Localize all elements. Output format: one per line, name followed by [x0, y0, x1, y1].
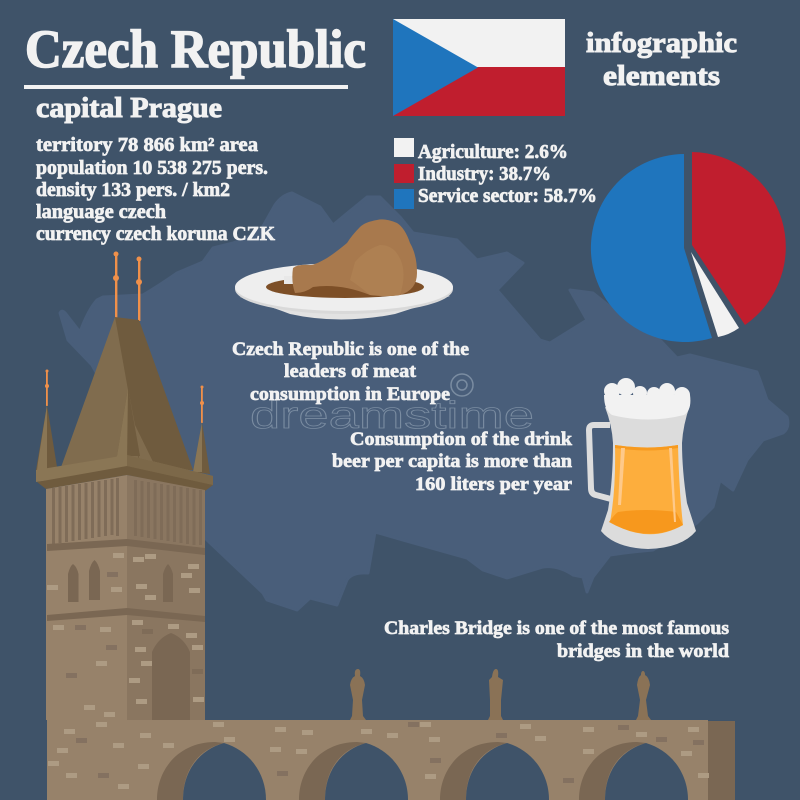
bridge arches [157, 742, 688, 800]
text: meat consumption: consumption in Europe [250, 384, 450, 405]
tower roof [36, 317, 213, 491]
icon: Czech flag [393, 19, 565, 116]
text: beer consumption: beer per capita is more than [332, 451, 572, 472]
country facts: currency czech koruna CZK [36, 224, 276, 245]
watermark: dreamstime [250, 395, 534, 437]
Charles Bridge [47, 720, 735, 800]
title underline [24, 85, 348, 89]
tower slats [52, 478, 202, 545]
tower finials [45, 252, 204, 423]
legend [394, 138, 597, 209]
legend: Industry: 38.7% [418, 164, 551, 185]
text: meat consumption: Czech Republic is one of the [232, 339, 469, 360]
country facts [36, 135, 276, 245]
tower bricks [47, 553, 204, 717]
bridge end pier [708, 721, 735, 800]
text: Charles Bridge: Charles Bridge is one of the most famous [384, 618, 729, 639]
country facts: territory 78 866 km² area [36, 135, 258, 156]
heading: infographic elements: infographic [586, 27, 737, 59]
text: meat consumption [232, 339, 469, 405]
heading: infographic elements: elements [603, 60, 720, 92]
icon: meat on plate [235, 219, 453, 320]
text: beer consumption [332, 429, 573, 495]
text: beer consumption: 160 liters per year [415, 474, 573, 495]
text: meat consumption: leaders of meat [284, 361, 417, 382]
beer foam [604, 378, 690, 420]
heading: infographic elements [586, 27, 737, 92]
text: beer consumption: Consumption of the drink [350, 429, 572, 450]
subtitle: capital: capital Prague [36, 92, 222, 124]
tower bands [47, 539, 205, 622]
country facts: density 133 pers. / km2 [36, 180, 230, 201]
watermark [250, 374, 534, 437]
pie chart [591, 152, 786, 342]
bridge deck [47, 720, 708, 800]
map of Czech Republic silhouette [60, 193, 788, 610]
legend: Agriculture: 2.6% [418, 142, 568, 163]
Old Town Bridge Tower [36, 252, 213, 720]
tower door [152, 633, 190, 720]
country facts: population 10 538 275 pers. [36, 158, 268, 179]
tower windows [68, 560, 173, 602]
text: Charles Bridge [384, 618, 729, 662]
bridge bricks [48, 722, 709, 789]
title: Czech Republic [25, 19, 366, 79]
icon: beer mug [589, 378, 696, 549]
statues on the bridge [350, 669, 651, 720]
text: Charles Bridge: bridges in the world [557, 641, 729, 662]
legend: Service sector: 58.7% [418, 186, 597, 207]
tower body [46, 475, 205, 720]
country facts: language czech [36, 202, 166, 223]
